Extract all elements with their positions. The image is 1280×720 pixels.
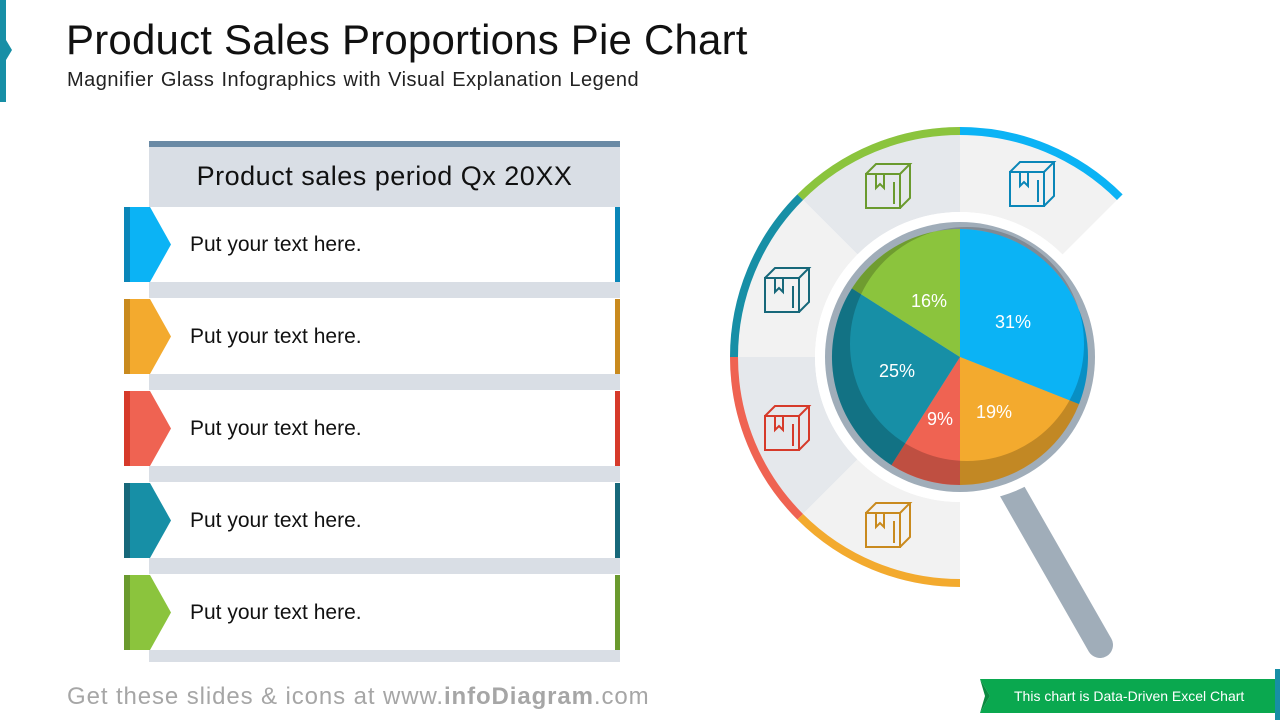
legend row 4 (124, 483, 620, 574)
legend row 3 (124, 391, 620, 482)
subtitle: Magnifier Glass Infographics with Visual Explanation Legend (67, 69, 639, 91)
ring segments (730, 127, 1123, 587)
icon: box green (866, 164, 910, 208)
pie labels: 19% (976, 402, 1012, 422)
title: Product Sales Proportions Pie Chart (66, 16, 748, 63)
lens (815, 212, 1105, 502)
legend row 3: Put your text here. (190, 417, 362, 440)
pie labels: 16% (911, 291, 947, 311)
pie slices (960, 229, 1088, 404)
legend row 4: Put your text here. (190, 509, 362, 532)
legend row 5 (124, 575, 620, 662)
pie labels: 9% (927, 409, 953, 429)
icon: box red (765, 406, 809, 450)
pie labels: 31% (995, 312, 1031, 332)
ribbon: data-driven (980, 669, 1280, 720)
icon: box blue (1010, 162, 1054, 206)
footer text: Get these slides & icons at www.infoDiagram.com (67, 683, 649, 710)
legend row 2: Put your text here. (190, 325, 362, 348)
legend row 1: Put your text here. (190, 233, 362, 256)
table header (149, 141, 620, 207)
magnifier handle (1000, 470, 1100, 645)
table header: Product sales period Qx 20XX (197, 161, 572, 191)
legend row 5: Put your text here. (190, 601, 362, 624)
left accent bar (0, 0, 12, 102)
icon: box orange (866, 503, 910, 547)
legend row 1 (124, 207, 620, 298)
legend row 2 (124, 299, 620, 390)
pie labels (879, 291, 1031, 429)
pie labels: 25% (879, 361, 915, 381)
icon: box teal (765, 268, 809, 312)
ribbon: data-driven: This chart is Data-Driven Excel Chart (1014, 688, 1244, 704)
